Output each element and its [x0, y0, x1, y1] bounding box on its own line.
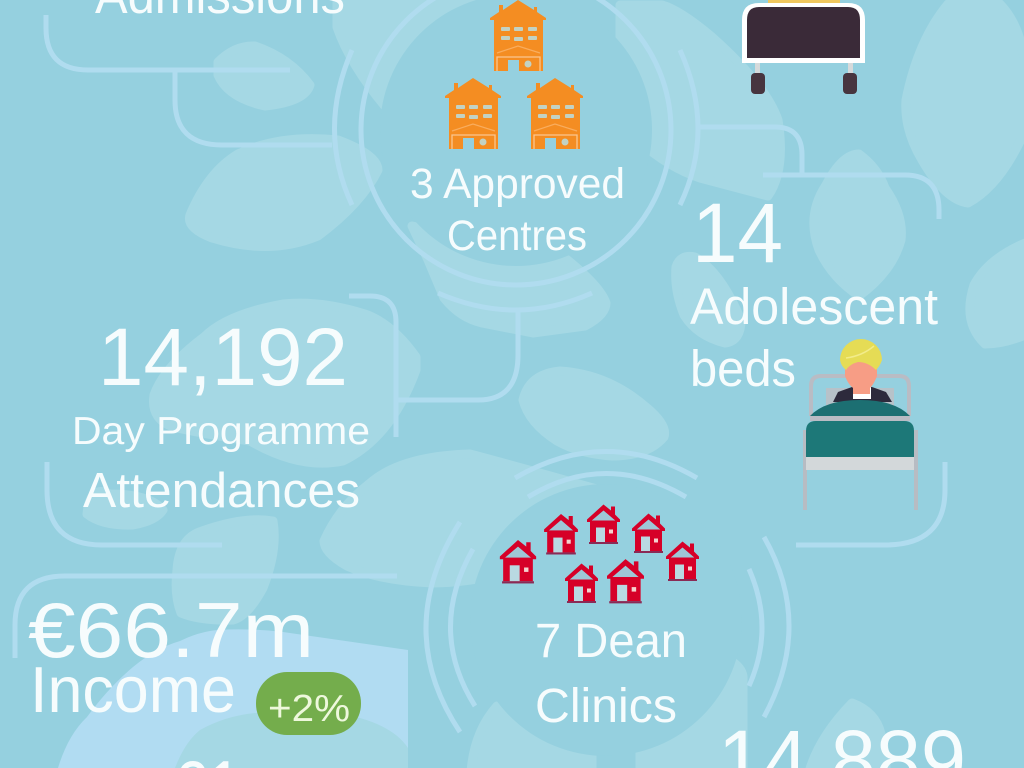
- badge: +2%: +2%: [268, 688, 350, 730]
- icon: empty bed: [742, 0, 865, 94]
- icon: orange houses: [445, 0, 583, 149]
- text: 7 dean clinics: [535, 615, 687, 733]
- circle and arcs: approved centres: [334, 0, 698, 310]
- clear interior: dean clinics circle: [470, 484, 742, 756]
- text: 14,192 day programme attendances: [72, 312, 370, 518]
- icon: red houses: [500, 504, 699, 603]
- badge: +2%: [256, 672, 361, 735]
- connector lines: [15, 15, 945, 658]
- big light blue leaf: [58, 629, 408, 768]
- text: 7 dean clinics: 7 Dean: [535, 615, 687, 668]
- text: income figure: [28, 586, 314, 726]
- text: 3 approved centres: Centres: [447, 212, 587, 260]
- text: 3 approved centres: 3 Approved: [410, 160, 625, 208]
- icon: patient in bed: [803, 339, 918, 510]
- inner leaf over big leaf: [175, 711, 408, 768]
- text: 14 adolescent beds: 14: [692, 186, 783, 280]
- text: 14 adolescent beds: beds: [690, 340, 796, 397]
- clear interior: approved centres circle: [380, 0, 652, 266]
- arcs: dean clinics: [426, 452, 789, 732]
- text: 14 adolescent beds: Adolescent: [690, 278, 938, 335]
- text: 7 dean clinics: Clinics: [535, 680, 677, 733]
- text: income figure: €66.7m: [28, 586, 314, 674]
- text: income figure: Income: [30, 653, 236, 726]
- text: 14,192 day programme attendances: 14,192: [98, 312, 348, 403]
- text: 14,192 day programme attendances: Attendances: [83, 464, 360, 518]
- text: 14,192 day programme attendances: Day Programme: [72, 410, 370, 453]
- text: 14 adolescent beds: [690, 186, 938, 397]
- text: 3 approved centres: [410, 160, 625, 260]
